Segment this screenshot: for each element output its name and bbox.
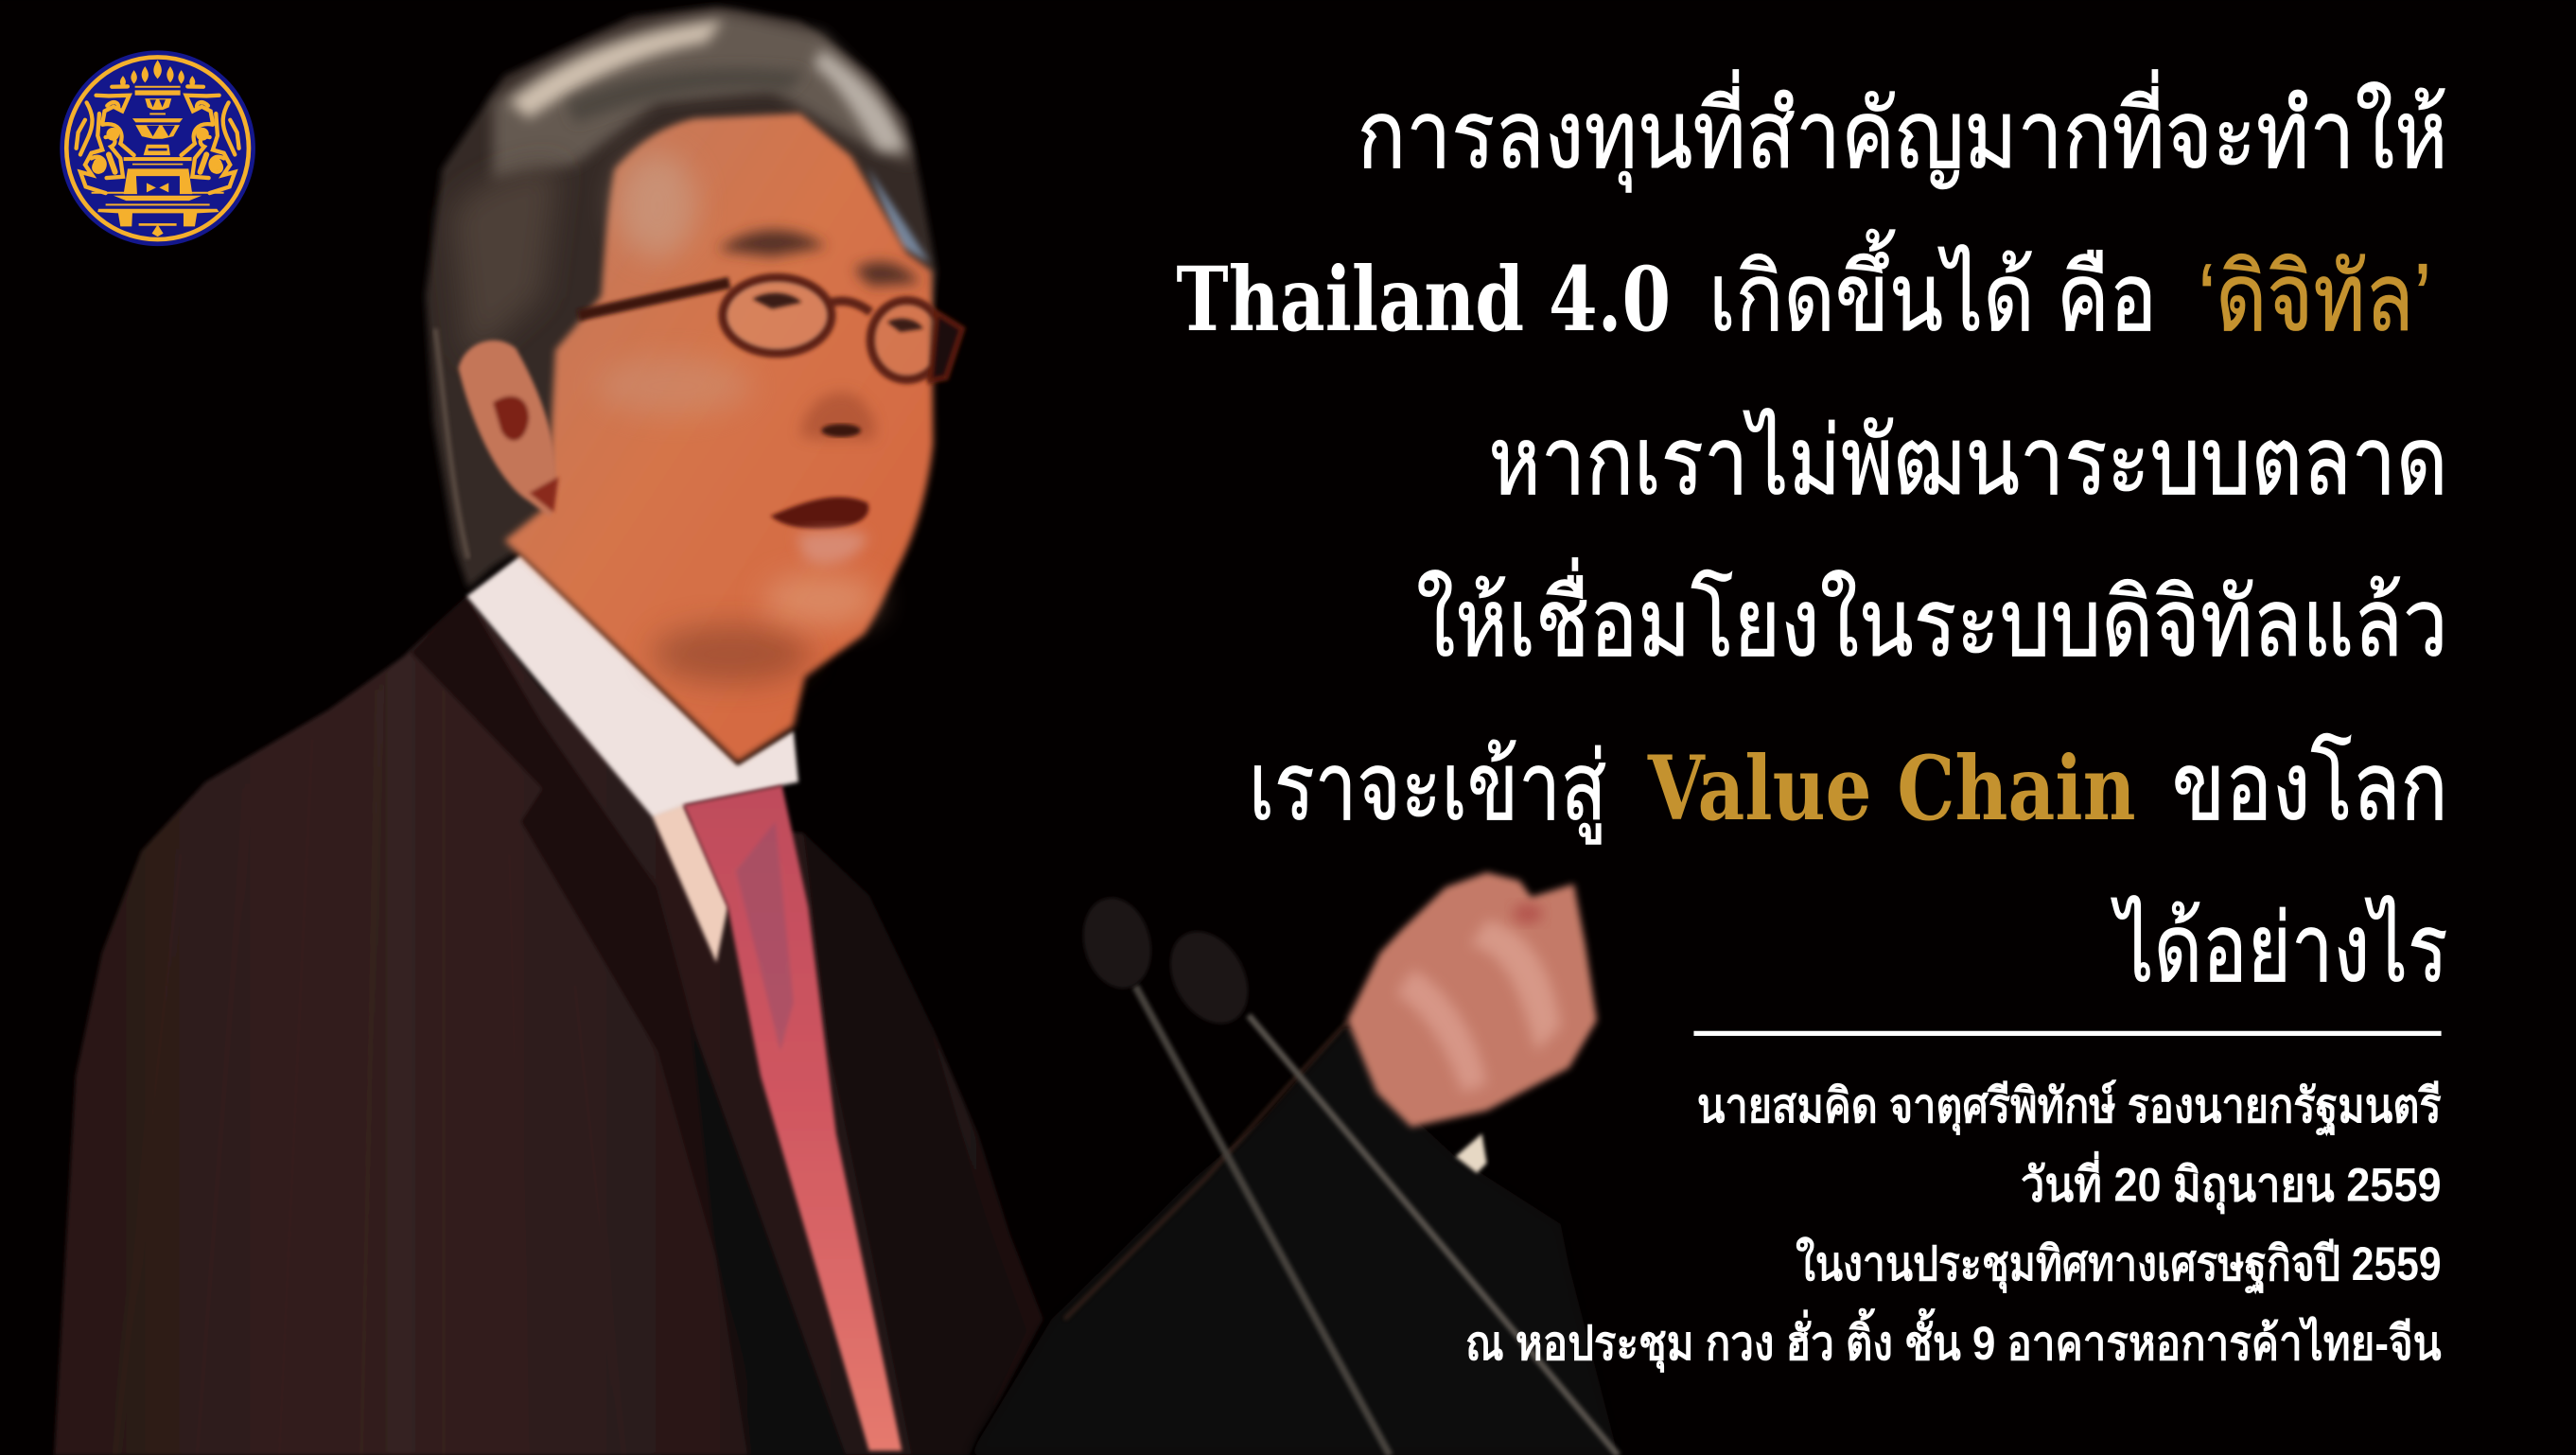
line 5: เราจะเข้าสู่ [1249,734,1606,844]
headline quote [1176,69,2448,1002]
hair [426,7,937,588]
urn panel details [147,99,175,150]
neck and face [504,114,933,763]
sleeve edge [1064,1022,1347,1320]
attribution divider [1693,1031,2442,1036]
line 2 [1176,229,2431,352]
right lion [182,86,239,193]
line 2: Thailand 4.0 [1176,248,1671,352]
eyes [752,293,923,332]
speaker name: นายสมคิด จาตุศรีพิทักษ์ รองนายกรัฐมนตรี [1697,1078,2442,1136]
line 2: ‘ดิจิทัล’ [2199,245,2431,351]
hair highlights [435,13,912,558]
flames, urn and pedestal [92,60,224,237]
date: วันที่ 20 มิถุนายน 2559 [2021,1150,2442,1214]
right sleeve [970,1022,1619,1455]
line 6: ได้อย่างไร [2111,896,2448,1002]
shirt collar [466,555,798,963]
left lion [77,86,134,193]
line 2: เกิดขึ้นได้ คือ [1709,229,2157,351]
logo: government seal [60,50,255,246]
line 5 [1249,733,2448,844]
venue: ณ หอประชุม กวง ฮั่ว ติ้ง ชั้น 9 อาคารหอการค้าไทย-จีน [1465,1307,2442,1373]
attribution text [1465,1078,2442,1373]
head and face [459,114,963,763]
glasses [578,278,963,381]
clenched fist [1347,872,1597,1173]
photo: speaker at microphones [54,7,1619,1455]
line 5: Value Chain [1647,737,2136,841]
ear [459,341,558,517]
event: ในงานประชุมทิศทางเศรษฐกิจปี 2559 [1796,1236,2442,1294]
line 5: ของโลก [2172,733,2448,840]
mouth [770,497,868,565]
eyebrow [718,230,920,286]
necktie [683,785,902,1450]
microphones [1074,890,1619,1455]
face shading [595,153,879,683]
suit jacket [54,596,1043,1455]
